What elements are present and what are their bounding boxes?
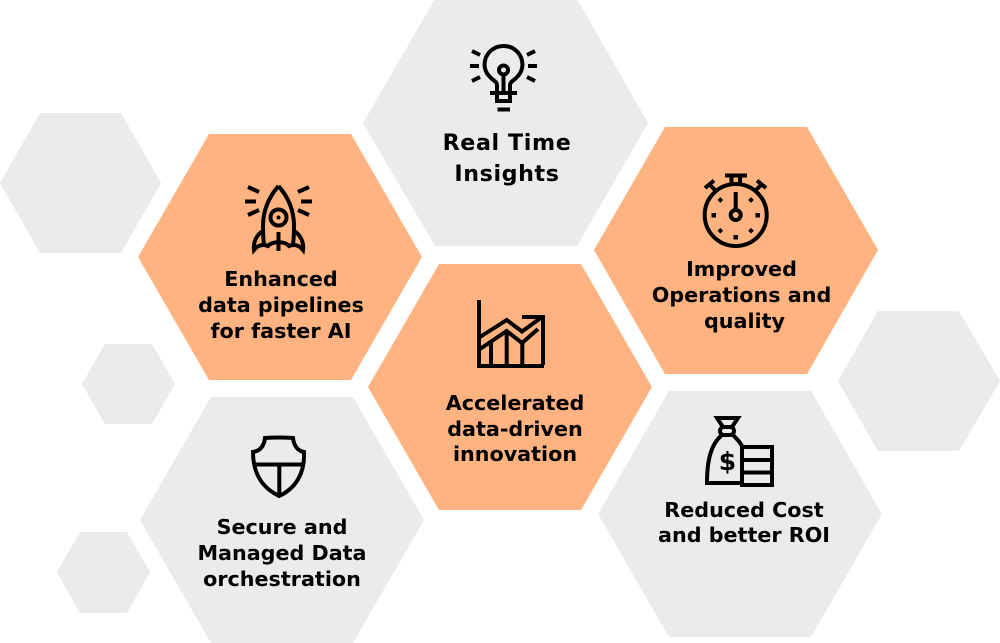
hexagon background (138, 134, 422, 380)
hexagon background (594, 127, 878, 374)
panel: Real Time Insights (363, 0, 648, 246)
text: Enhanced data pipelines for faster AI: Enhanced (224, 267, 338, 291)
text: Accelerated data-driven innovation: innovation (453, 442, 577, 466)
text: Improved Operations and quality: Improved (686, 257, 797, 281)
hexagon background (140, 397, 424, 643)
text: Enhanced data pipelines for faster AI: for faster AI (211, 319, 351, 343)
panel: Improved Operations and quality (594, 127, 878, 374)
hexagon background (598, 391, 882, 637)
icon: shield (253, 438, 304, 496)
heading: Real Time Insights: Real Time (443, 130, 571, 156)
icon label: dollar sign: $ (719, 447, 736, 476)
text: Accelerated data-driven innovation: data-driven (447, 417, 583, 441)
panel: Accelerated data-driven innovation (368, 264, 652, 510)
text: Reduced Cost and better ROI: and better ROI (658, 523, 830, 547)
panel: Secure and Managed Data orchestration (140, 397, 424, 643)
text: Reduced Cost and better ROI: Reduced Cost (664, 498, 824, 522)
icon: light bulb (470, 46, 537, 110)
text: Accelerated data-driven innovation: Accelerated (446, 391, 584, 415)
text: Enhanced data pipelines for faster AI: data pipelines (198, 293, 364, 317)
icon: stopwatch (705, 176, 767, 246)
panel: Enhanced data pipelines (138, 134, 422, 380)
decorative hexagon: small left lower (57, 532, 150, 613)
icon: growth chart (479, 300, 544, 366)
icon: rocket (245, 186, 312, 251)
text: Improved Operations and quality: Operations and (652, 283, 831, 307)
text: Improved Operations and quality: quality (704, 309, 786, 333)
hexagon background (368, 264, 652, 510)
text: Secure and Managed Data orchestration: Secure and (217, 515, 347, 539)
text: Secure and Managed Data orchestration: orchestration (203, 567, 361, 591)
heading: Real Time Insights: Insights (454, 161, 560, 187)
decorative hexagon: small left upper (82, 344, 175, 424)
panel: Reduced Cost and better ROI (598, 391, 882, 637)
text: Secure and Managed Data orchestration: Managed Data (197, 541, 367, 565)
decorative hexagon: far left (0, 113, 161, 253)
icon: money bag and coins (707, 418, 772, 485)
decorative hexagon: far right (838, 311, 1000, 451)
hexagon background (363, 0, 648, 246)
